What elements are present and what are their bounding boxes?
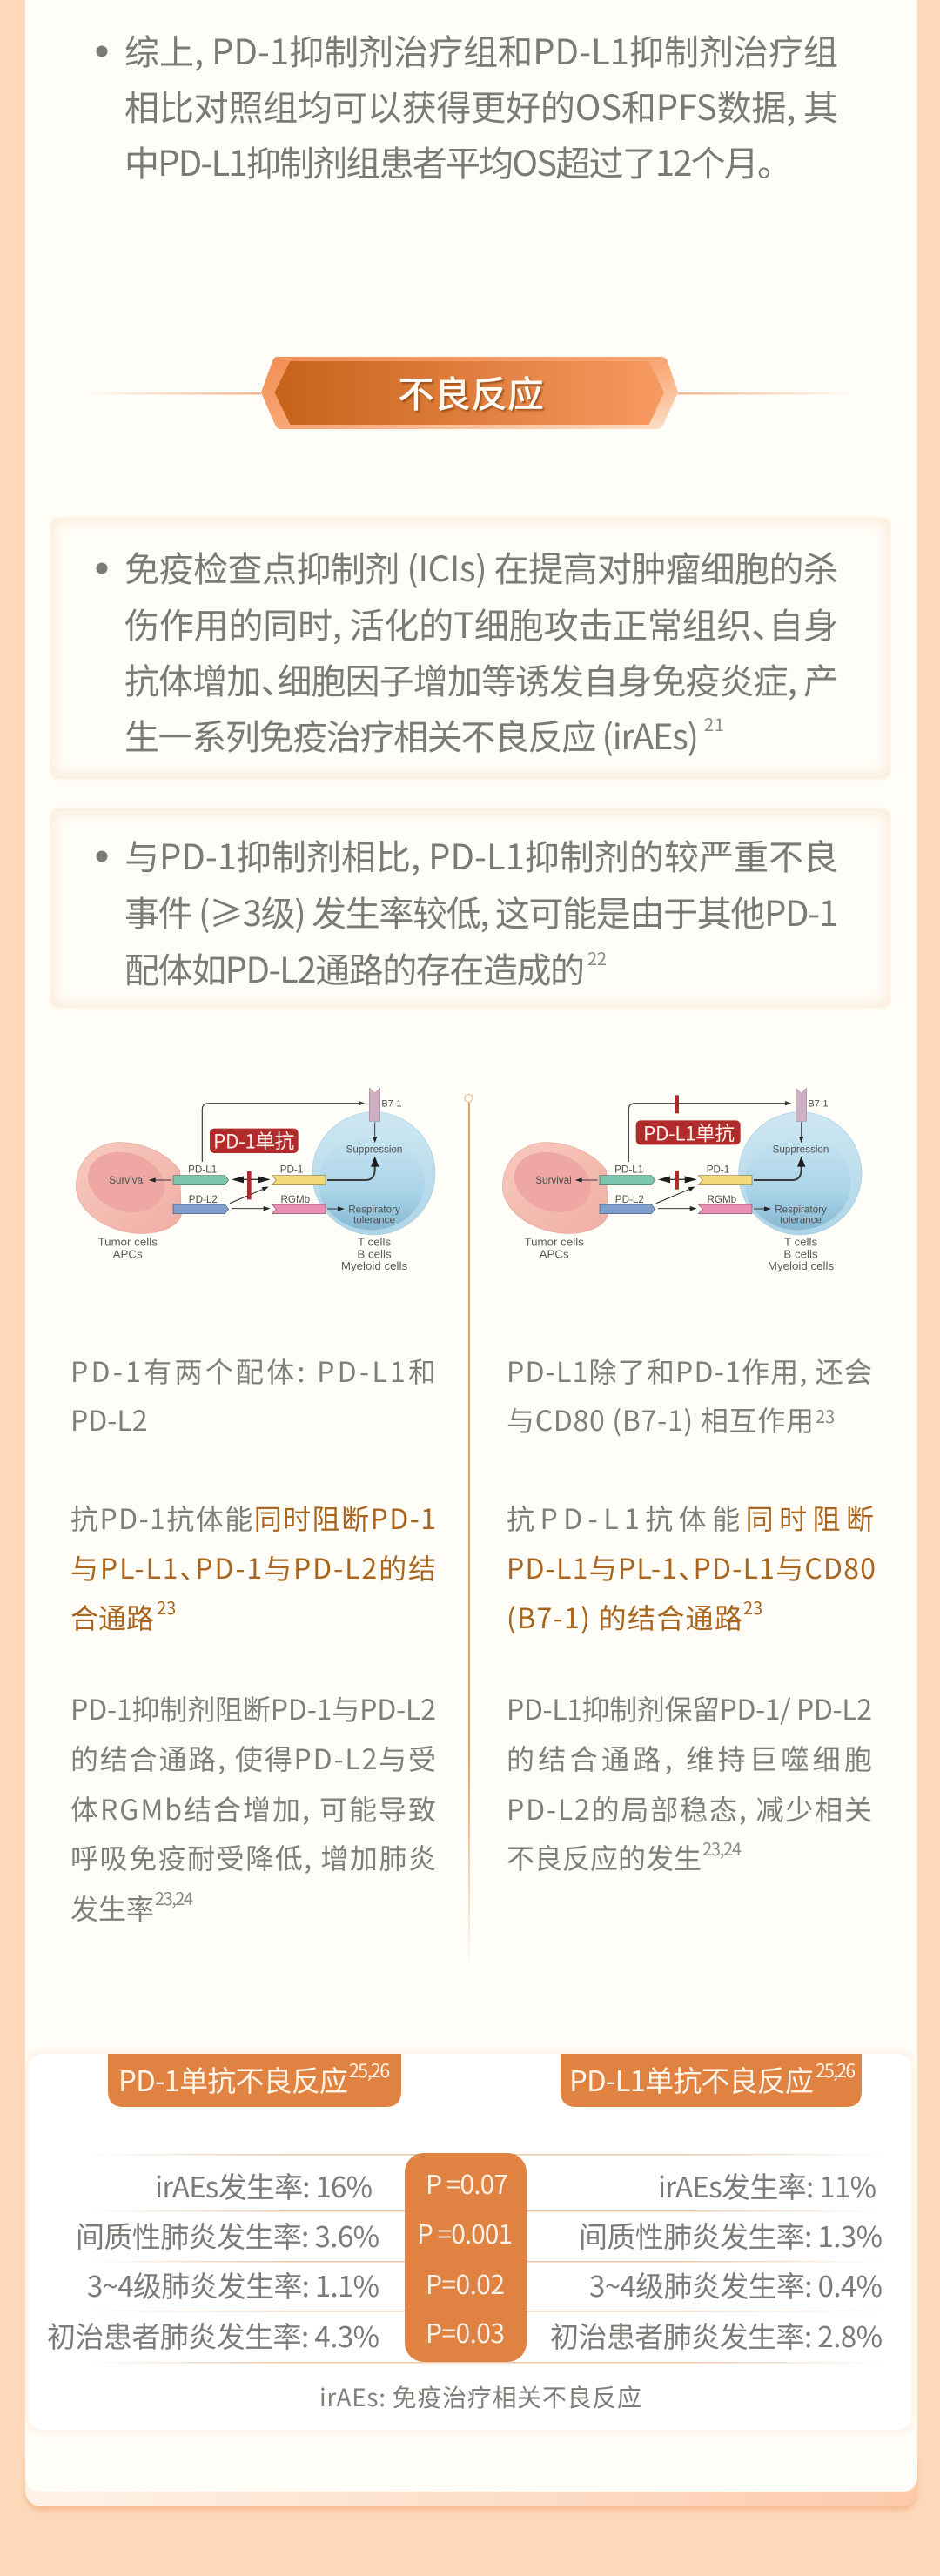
left column text: PD-1: 23 [157,1594,176,1620]
blocking bar [247,1171,252,1199]
card text: irAEs intro: 21 [704,711,724,736]
right column text: PD-L1: PD-L1与PL-1、PD-L1与CD80 [507,1547,876,1587]
diagram: PD-1 antibody [76,1088,435,1272]
cell labels: T cells [784,1235,817,1248]
adverse reaction table card background [29,2054,911,2430]
B7-1 receptor: B7-1 [808,1099,829,1110]
p-value column: P=0.02 [426,2264,505,2302]
section heading: 不良反应: 不良反应 [398,366,544,419]
diagram: PD-L1 antibody [502,1088,862,1272]
cell labels: Tumor cells [524,1235,584,1248]
right column text: PD-L1: 23 [743,1594,762,1620]
molecule: PD-L1: PD-L1 [188,1164,217,1176]
cell labels: Survival [535,1175,572,1186]
table column: PD-1 rates: 初治患者肺炎发生率: 4.3% [47,2314,379,2356]
table header tab: PD-1 [108,2054,401,2107]
molecule: PD-1: PD-1 [280,1164,303,1176]
cell labels: tolerance [780,1215,822,1226]
drug label: PD-L1单抗 [643,1117,735,1146]
summary bullet text: 相比对照组均可以获得更好的OS和PFS数据, 其 [124,80,838,131]
card text: PD-L1 comparison: 事件 (≥3级) 发生率较低, 这可能是由于其他PD-1 [124,886,838,936]
table header tab: PD-L1: PD-L1单抗不良反应 [569,2058,814,2100]
p-value column [405,2153,527,2362]
card text: PD-L1 comparison: 配体如PD-L2通路的存在造成的 [124,943,585,993]
table column: PD-1 rates: 3~4级肺炎发生率: 1.1% [87,2264,379,2305]
table header tab: PD-1: 25,26 [349,2057,390,2083]
card text: PD-L1 comparison [96,829,838,993]
card text: irAEs intro: 抗体增加、细胞因子增加等诱发自身免疫炎症, 产 [124,654,838,704]
table column: PD-L1 rates: 间质性肺炎发生率: 1.3% [579,2214,883,2256]
p-value column: P =0.001 [417,2213,513,2251]
molecule: PD-L1 [600,1164,655,1185]
panel lip [25,2454,917,2506]
blocking bars [675,1095,679,1190]
right column text: PD-L1: PD-L1抑制剂保留PD-1/ PD-L2 [507,1688,872,1728]
cell labels: Tumor cells [97,1235,158,1248]
cell labels: B cells [357,1247,392,1260]
molecule: RGMb [272,1194,326,1214]
left column text: PD-1: 发生率 [70,1888,154,1928]
cell labels: tolerance [353,1215,395,1226]
molecule: PD-1 [698,1164,752,1185]
table footnote: irAEs: 免疫治疗相关不良反应 [319,2379,641,2414]
left column text: PD-1: 的结合通路, 使得PD-L2与受 [70,1738,436,1778]
right column text: PD-L1: 不良反应的发生 [507,1837,702,1877]
table column: PD-L1 rates: 3~4级肺炎发生率: 0.4% [589,2264,883,2305]
cell labels: Survival [109,1175,145,1186]
molecule: PD-L1: PD-L1 [614,1164,643,1176]
drug label: PD-1单抗 [213,1126,294,1155]
card text: irAEs intro: 伤作用的同时, 活化的T细胞攻击正常组织、自身 [124,598,838,648]
right column text: PD-L1: 23,24 [702,1835,742,1861]
cell labels: APCs [540,1247,569,1260]
cell labels: Respiratory [348,1204,400,1215]
left column text: PD-1: PD-L2 [70,1399,148,1439]
right column text: PD-L1: 抗PD-L1抗体能同时阻断 [507,1498,874,1538]
left column text: PD-1: PD-1抑制剂阻断PD-1与PD-L2 [70,1688,436,1728]
table header tab: PD-L1 [561,2054,862,2107]
pathway arrows [575,1101,805,1211]
cell labels: Myeloid cells [341,1259,407,1272]
immune cell [739,1112,862,1235]
column divider [465,1095,473,1969]
molecule: PD-1 [272,1164,326,1185]
card: irAEs intro background [50,518,890,779]
molecule: PD-L2: PD-L2 [615,1194,644,1205]
molecule: RGMb: RGMb [280,1194,310,1205]
card text: PD-L1 comparison: 与PD-1抑制剂相比, PD-L1抑制剂的较严重不良 [124,829,838,880]
cell labels: Suppression [773,1144,829,1155]
cell labels: T cells [358,1235,391,1248]
summary bullet text: 中PD-L1抑制剂组患者平均OS超过了12个月。 [124,136,792,186]
table column: PD-L1 rates: 初治患者肺炎发生率: 2.8% [550,2314,883,2356]
left column text: PD-1: 呼吸免疫耐受降低, 增加肺炎 [70,1837,436,1877]
left column text: PD-1: 合通路 [70,1597,154,1637]
cell labels: Myeloid cells [768,1259,834,1272]
molecule: RGMb [698,1194,752,1214]
molecule: PD-L2: PD-L2 [189,1194,218,1205]
table column: PD-1 rates: irAEs发生率: 16% [155,2164,373,2206]
left column text: PD-1: 与PL-L1、PD-1与PD-L2的结 [70,1547,436,1587]
card text: irAEs intro [96,541,838,760]
left column text: PD-1: 抗PD-1抗体能同时阻断PD-1 [70,1498,436,1538]
left column text: PD-1: PD-1有两个配体: PD-L1和 [70,1351,436,1391]
card: PD-L1 comparison background [50,808,890,1008]
table header tab: PD-1: PD-1单抗不良反应 [118,2058,348,2100]
cell labels [97,1144,407,1272]
summary bullet text [96,24,838,186]
table column: PD-L1 rates: irAEs发生率: 11% [658,2164,876,2206]
right column text: PD-L1 [507,1351,876,1877]
immune cell [312,1112,435,1235]
right column text: PD-L1: PD-L2的局部稳态, 减少相关 [507,1788,872,1828]
summary bullet text: 综上, PD-1抑制剂治疗组和PD-L1抑制剂治疗组 [124,24,838,75]
pathway arrows [149,1101,379,1211]
cell labels [524,1144,834,1272]
B7-1 receptor [369,1088,402,1121]
card text: PD-L1 comparison: 22 [588,945,607,970]
left column text: PD-1: 23,24 [155,1885,193,1910]
left column text: PD-1 [70,1351,436,1928]
left column text: PD-1: 体RGMb结合增加, 可能导致 [70,1788,436,1828]
cell labels: Suppression [346,1144,402,1155]
right column text: PD-L1: 23 [816,1403,835,1428]
tumor cell [76,1143,181,1233]
molecule: PD-L2 [173,1194,229,1214]
molecule: PD-L1 [173,1164,229,1185]
right column text: PD-L1: 与CD80 (B7-1) 相互作用 [507,1399,814,1439]
tumor cell [502,1143,608,1233]
molecule: RGMb: RGMb [707,1194,736,1205]
card text: irAEs intro: 免疫检查点抑制剂 (ICIs) 在提高对肿瘤细胞的杀 [124,541,838,592]
p-value column: P=0.03 [426,2312,505,2351]
molecule: PD-L2 [600,1194,655,1214]
section heading: 不良反应 [84,357,857,429]
B7-1 receptor: B7-1 [381,1099,402,1110]
molecule: PD-1: PD-1 [707,1164,729,1176]
cell labels: Respiratory [775,1204,827,1215]
table column: PD-L1 rates [550,2164,883,2356]
table column: PD-1 rates [47,2164,379,2356]
cell labels: APCs [113,1247,143,1260]
B7-1 receptor [796,1088,829,1121]
right column text: PD-L1: (B7-1) 的结合通路 [507,1597,742,1637]
table header tab: PD-L1: 25,26 [816,2057,856,2083]
right column text: PD-L1: PD-L1除了和PD-1作用, 还会 [507,1351,872,1391]
p-value column: P =0.07 [426,2163,508,2202]
card text: irAEs intro: 生一系列免疫治疗相关不良反应 (irAEs) [124,709,699,760]
table column: PD-1 rates: 间质性肺炎发生率: 3.6% [76,2214,379,2256]
cell labels: B cells [783,1247,818,1260]
table rules [84,2154,887,2364]
right column text: PD-L1: 的结合通路, 维持巨噬细胞 [507,1738,872,1778]
